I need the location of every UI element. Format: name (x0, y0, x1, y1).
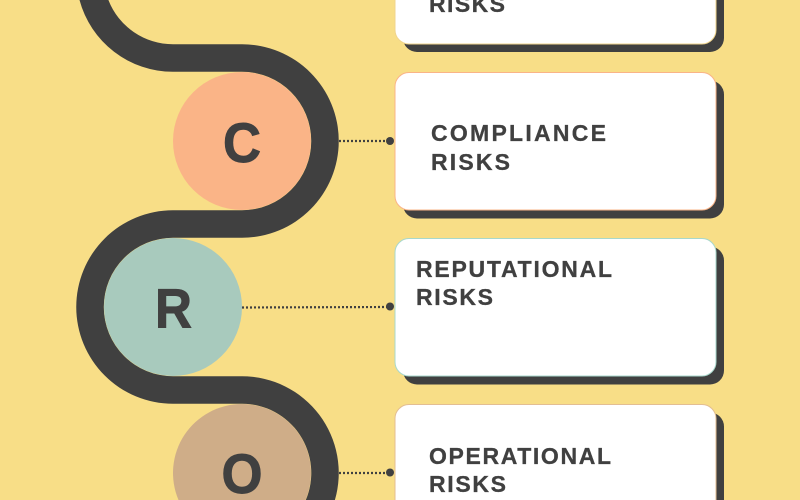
card: reputational risks: RISKS (416, 284, 493, 310)
card: reputational risks (395, 238, 724, 384)
circle step: C (173, 72, 311, 210)
card: operational risks: OPERATIONAL (429, 443, 611, 469)
winding path (76, 0, 339, 500)
connector: C to compliance card (339, 137, 394, 145)
card: top risks (cropped) (395, 0, 724, 52)
connector: R to reputational card (242, 302, 394, 310)
card: reputational risks: REPUTATIONAL (416, 256, 612, 282)
circle step: R: R (155, 276, 192, 340)
circle step: R (104, 238, 242, 376)
card: operational risks (395, 404, 724, 500)
circle step: C: C (223, 111, 261, 174)
card: compliance risks: RISKS (431, 149, 510, 175)
card: operational risks: RISKS (429, 471, 506, 497)
card: compliance risks (395, 72, 724, 218)
card: compliance risks: COMPLIANCE (431, 120, 606, 146)
connector: O to operational card (339, 468, 394, 476)
circle step: O (173, 404, 311, 500)
